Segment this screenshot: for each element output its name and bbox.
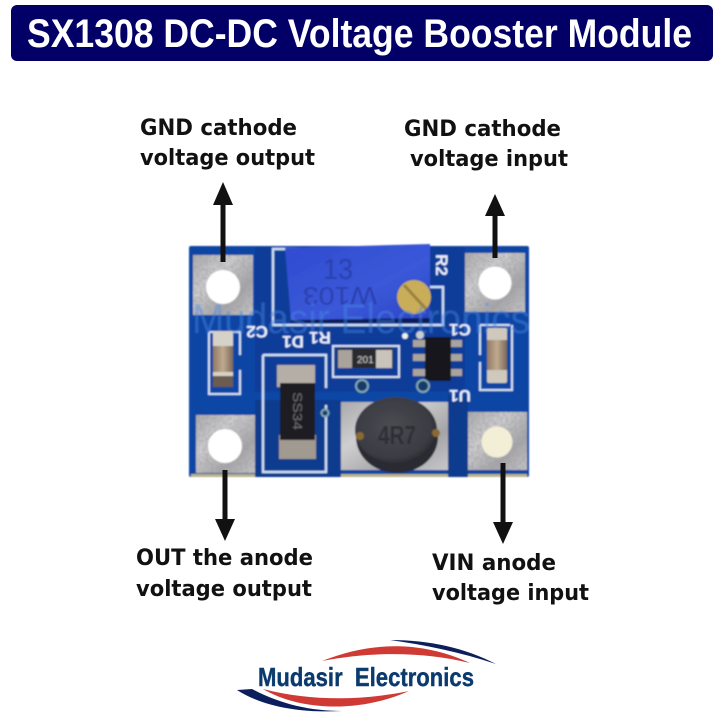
silkscreen designators: C1 bbox=[449, 320, 471, 339]
label: GND cathode voltage input: voltage input bbox=[410, 147, 568, 172]
trimmer potentiometer bbox=[285, 244, 431, 323]
title banner bbox=[11, 5, 713, 61]
label: GND cathode voltage input: GND cathode bbox=[404, 117, 561, 142]
silkscreen outlines bbox=[209, 249, 512, 472]
logo: Mudasir Electronics bbox=[237, 640, 496, 711]
label: GND cathode voltage output: voltage output bbox=[140, 146, 315, 171]
vias bbox=[322, 380, 429, 416]
logo swoosh: navy bottom bbox=[237, 689, 342, 711]
label: VIN anode voltage input bbox=[432, 551, 589, 606]
label: VIN anode voltage input: voltage input bbox=[432, 581, 589, 606]
arrow: bottom-right down bbox=[493, 463, 513, 544]
inductor bbox=[341, 397, 448, 473]
silkscreen designators: D1 bbox=[282, 332, 304, 351]
diode SS34 bbox=[277, 365, 316, 459]
silkscreen designators: R2 bbox=[432, 254, 451, 276]
logo wordmark: Mudasir Electronics bbox=[258, 662, 474, 692]
logo swoosh: navy top bbox=[390, 640, 496, 664]
pad top-right bbox=[465, 253, 525, 312]
IC U1 bbox=[402, 331, 462, 381]
silkscreen designators: C2 bbox=[246, 322, 268, 341]
resistor 201 bbox=[337, 348, 393, 368]
silkscreen designators bbox=[246, 254, 471, 405]
resistor 201: 201 bbox=[357, 355, 374, 366]
label: GND cathode voltage input bbox=[404, 117, 568, 172]
trimmer potentiometer: 13 bbox=[323, 254, 353, 286]
label: VIN anode voltage input: VIN anode bbox=[432, 551, 556, 576]
label: GND cathode voltage output: GND cathode bbox=[140, 116, 297, 141]
pad top-left bbox=[193, 255, 253, 315]
arrow: top-right up bbox=[485, 194, 505, 258]
arrow: bottom-left down bbox=[215, 470, 235, 541]
capacitor C1 bbox=[487, 328, 507, 383]
arrow: top-left up bbox=[213, 182, 233, 262]
label: OUT the anode voltage output: voltage output bbox=[136, 577, 312, 602]
label: OUT the anode voltage output bbox=[136, 546, 313, 602]
trimmer potentiometer: W103 bbox=[303, 281, 377, 309]
watermark: Mudasir Electronics bbox=[192, 295, 530, 342]
pad bottom-right bbox=[468, 412, 527, 470]
diode SS34: SS34 bbox=[290, 392, 305, 430]
inductor: 4R7 bbox=[378, 420, 416, 450]
logo swoosh: red bottom bbox=[263, 689, 409, 707]
capacitor C2 bbox=[213, 331, 233, 387]
label: GND cathode voltage output bbox=[140, 116, 315, 171]
label: OUT the anode voltage output: OUT the anode bbox=[136, 546, 313, 571]
silkscreen designators: U1 bbox=[449, 386, 471, 405]
silkscreen designators: R1 bbox=[309, 328, 331, 347]
circuit board bbox=[189, 246, 529, 477]
pad bottom-left bbox=[196, 415, 255, 473]
PCB module photo bbox=[189, 244, 530, 477]
logo swoosh: red top bbox=[322, 646, 470, 663]
